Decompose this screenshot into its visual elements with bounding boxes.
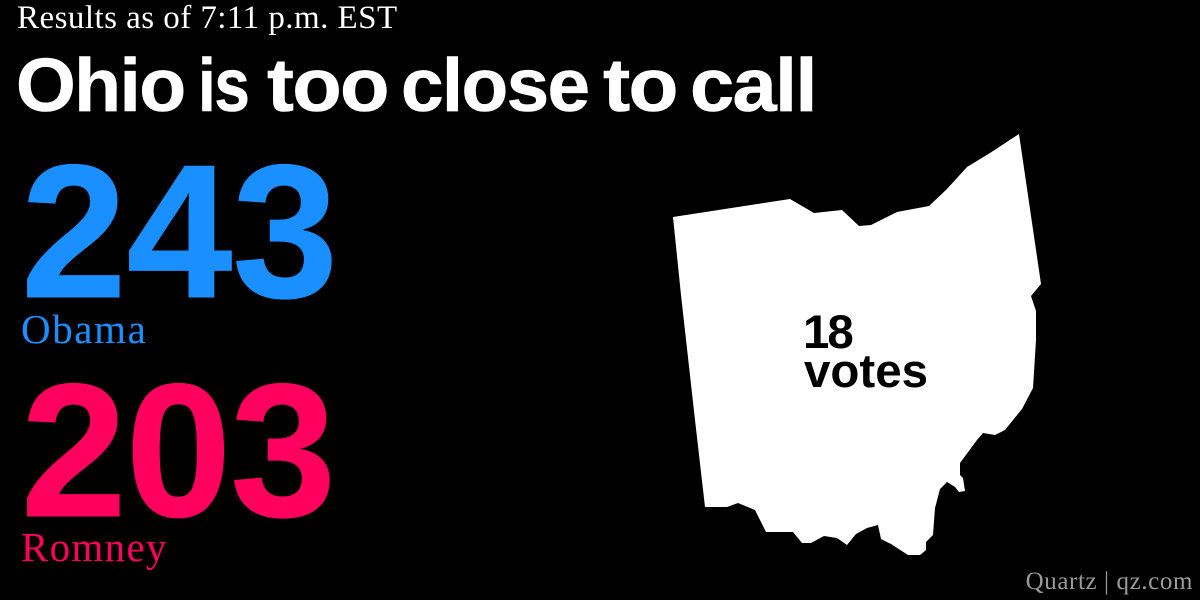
vote count label: 18 <box>803 306 852 359</box>
timestamp: Results as of 7:11 p.m. EST <box>17 0 398 36</box>
Obama electoral votes: 243 <box>21 126 338 338</box>
Ohio state shape <box>673 134 1041 555</box>
title: call <box>690 43 816 127</box>
title <box>16 43 816 127</box>
title: Ohio <box>16 43 185 127</box>
source credit: Quartz | qz.com <box>1026 568 1193 595</box>
Romney label: Romney <box>21 524 168 570</box>
Romney electoral votes: 203 <box>21 345 335 557</box>
title: too <box>267 43 388 127</box>
Obama label: Obama <box>21 306 147 352</box>
title: to <box>603 43 677 127</box>
title: close <box>401 43 588 127</box>
title: is <box>198 43 248 127</box>
vote count label: votes <box>804 345 928 398</box>
